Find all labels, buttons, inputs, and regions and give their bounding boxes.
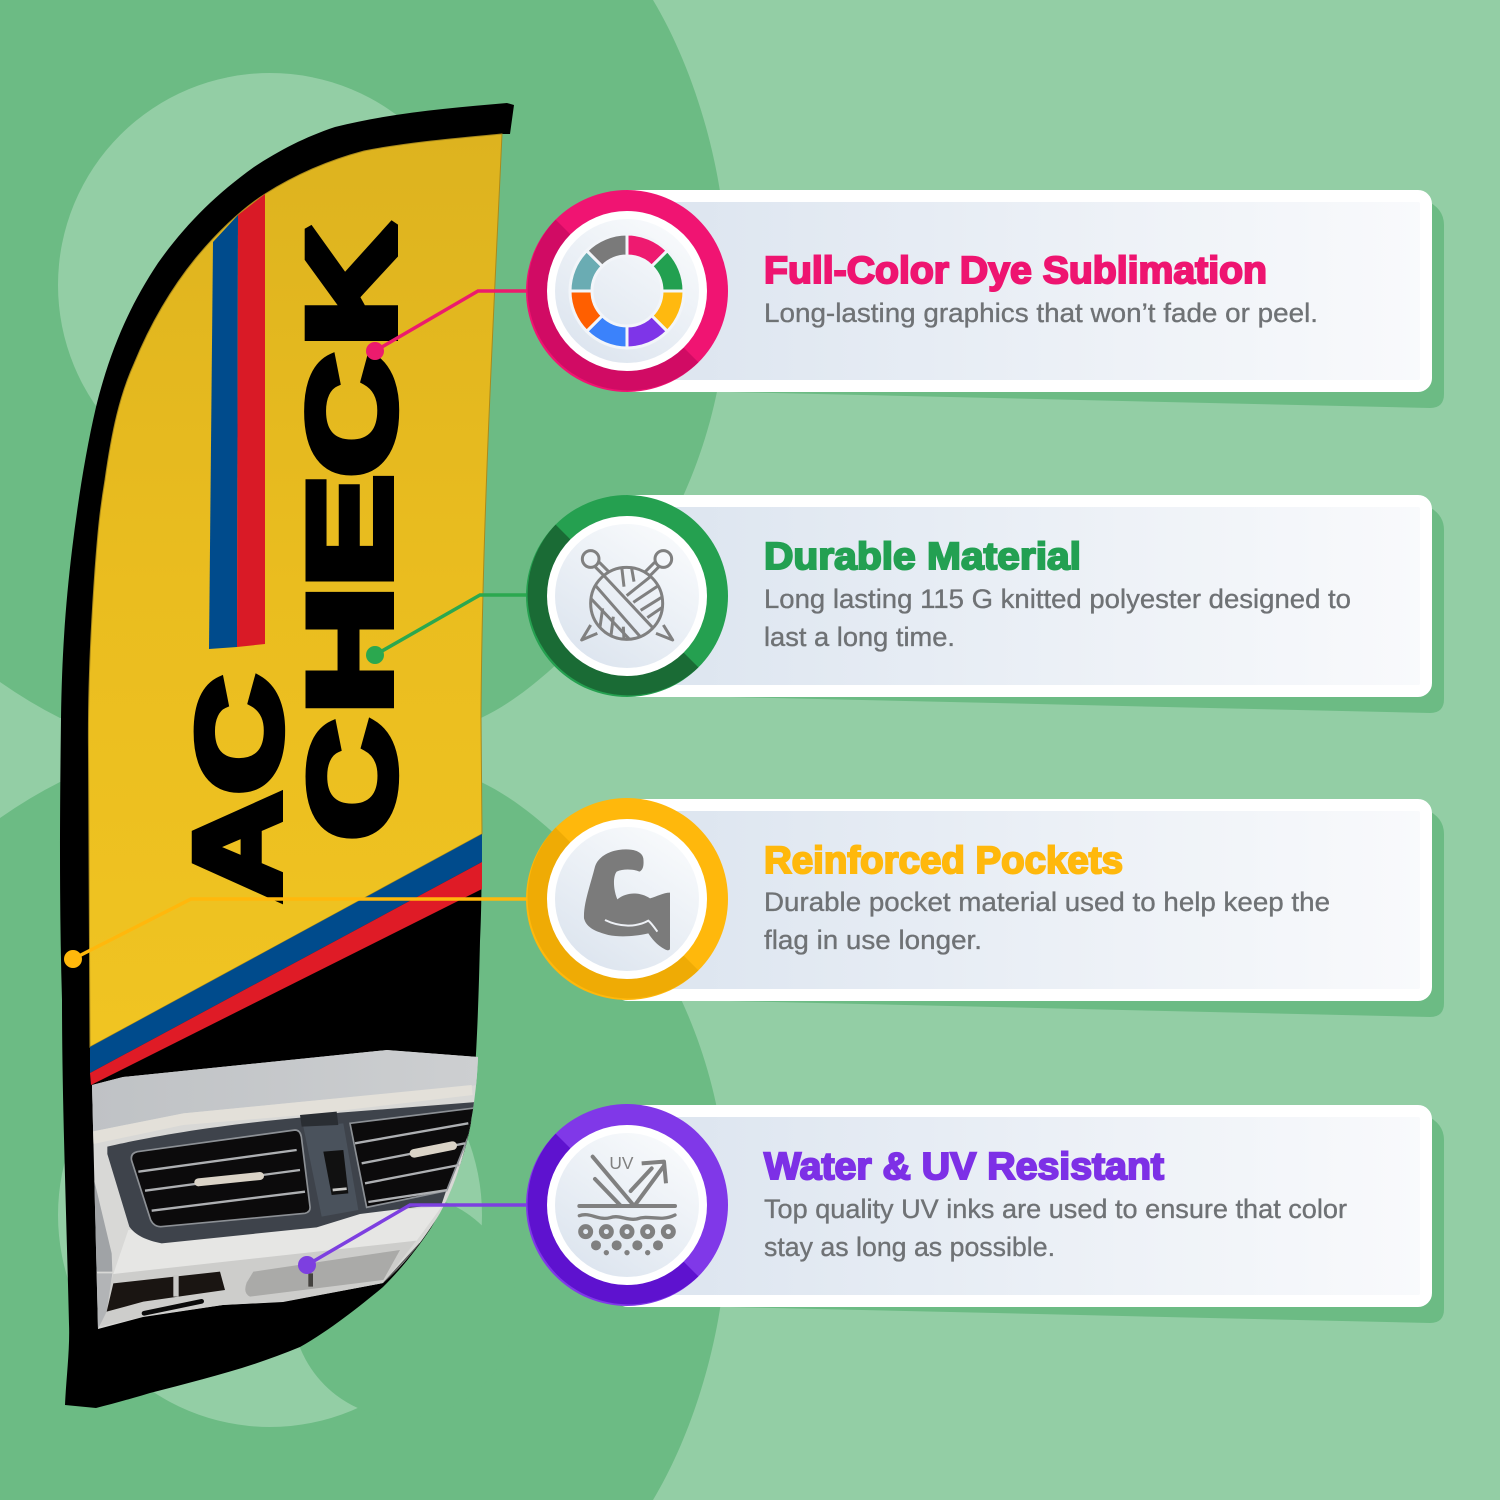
heading: Full-Color Dye Sublimation (764, 250, 1267, 292)
badge ring (526, 190, 728, 392)
description: Long lasting 115 G knitted polyester designed to (764, 584, 1351, 614)
heading: Reinforced Pockets (764, 840, 1123, 882)
badge ring (526, 1104, 728, 1306)
feather flag (60, 103, 514, 1408)
panel: reinforced pockets (526, 798, 1444, 1017)
connector: green (366, 595, 530, 664)
center column (303, 1123, 358, 1217)
panel: full-color dye sublimation (526, 190, 1444, 408)
dashboard photo (83, 1043, 490, 1337)
left vent (131, 1130, 310, 1227)
lower openings (107, 1272, 225, 1312)
card shadow (730, 1115, 1444, 1323)
description (764, 887, 1330, 955)
vertical red stripe (237, 194, 265, 647)
icon: UV protection (579, 1153, 675, 1255)
card shadow (730, 505, 1444, 713)
card shadow (730, 809, 1444, 1017)
badge ring (526, 798, 728, 1000)
panel: water and UV resistant (526, 1104, 1444, 1323)
flag text AC: A (169, 793, 305, 901)
diagonal blue stripe (90, 834, 482, 1073)
flag text CHECK: C (284, 353, 421, 477)
flag text CHECK: E (284, 475, 415, 587)
description: stay as long as possible. (764, 1232, 1055, 1262)
heading: Water & UV Resistant (764, 1146, 1164, 1188)
connector: purple (298, 1205, 530, 1274)
flag yellow field (88, 134, 502, 1047)
diagonal red stripe (90, 862, 482, 1085)
description: flag in use longer. (764, 925, 982, 955)
dashboard top pad (90, 1050, 480, 1132)
description: Durable pocket material used to help keep the (764, 887, 1330, 917)
icon: flexed arm (584, 849, 670, 950)
connector: pink (366, 291, 530, 360)
card shadow (730, 200, 1444, 408)
panel: durable material (526, 495, 1444, 713)
badge ring (526, 495, 728, 697)
connector: yellow (64, 899, 530, 968)
heading: Durable Material (764, 536, 1081, 578)
flag text CHECK: K (283, 223, 421, 347)
card (620, 196, 1426, 386)
icon: yarn ball with needles (582, 551, 673, 643)
description: last a long time. (764, 622, 955, 652)
right vent (350, 1107, 480, 1207)
description (764, 1194, 1347, 1262)
description: Top quality UV inks are used to ensure that color (764, 1194, 1347, 1224)
flag black body (60, 103, 514, 1408)
vertical blue stripe (209, 215, 238, 649)
card (620, 1111, 1426, 1301)
flag text CHECK: H (284, 586, 415, 714)
description: Long-lasting graphics that won’t fade or peel. (764, 298, 1318, 328)
flag text CHECK (283, 223, 421, 840)
card (620, 805, 1426, 995)
description (764, 584, 1351, 652)
icon: UV protection: UV (609, 1153, 634, 1173)
icon: color wheel (558, 222, 696, 360)
vent housing (107, 1102, 480, 1243)
lower body shading (100, 1240, 417, 1327)
flag text AC (169, 676, 306, 901)
flag text AC: C (174, 676, 306, 794)
card (620, 501, 1426, 691)
flag text CHECK: C (284, 720, 420, 840)
